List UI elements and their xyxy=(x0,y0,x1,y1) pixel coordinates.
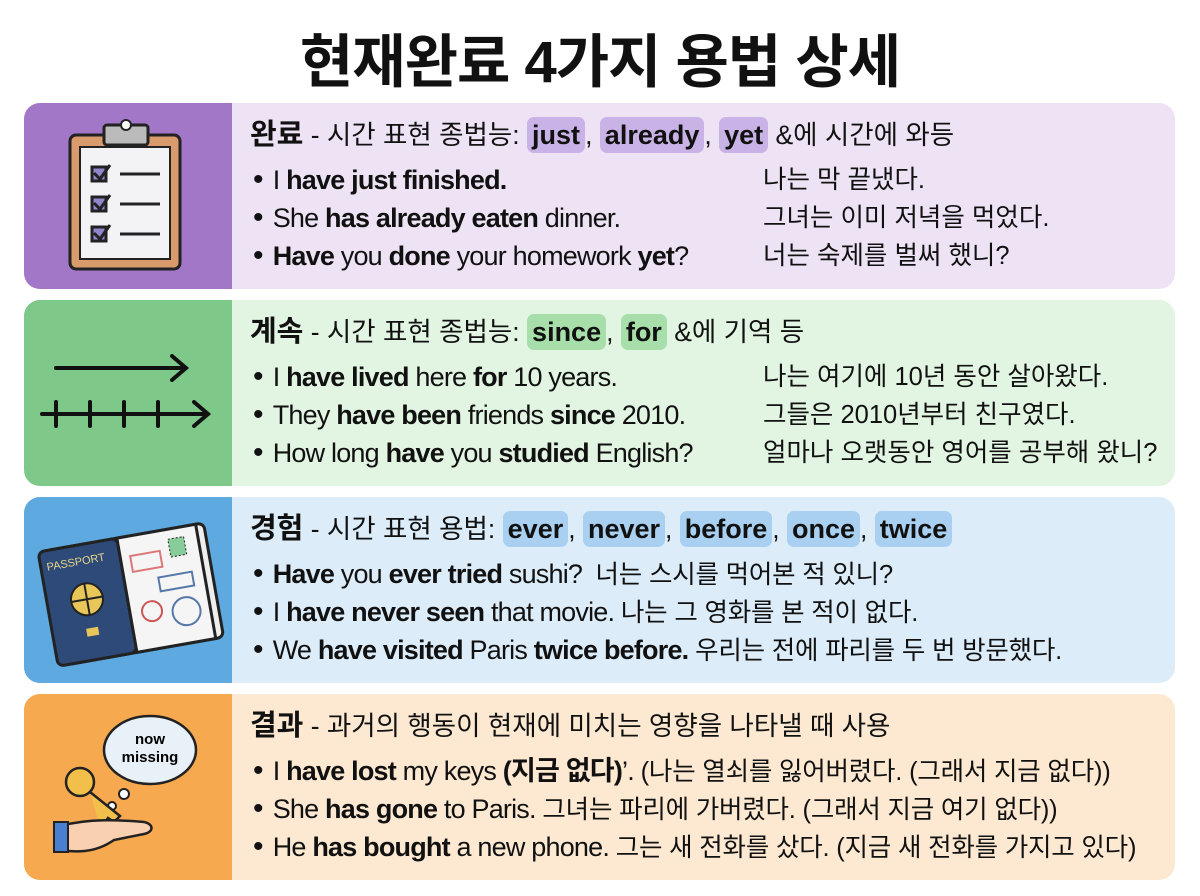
text: 경험 xyxy=(250,511,1062,666)
text: 완료: • Have you done your homework yet? xyxy=(253,239,688,272)
panel: 완료 xyxy=(24,103,1175,289)
icon: timeline arrows xyxy=(24,300,232,486)
text: 경험: • Have you ever tried sushi? 너는 스시를 먹어본 적 있니? xyxy=(253,557,893,590)
icon: hand, key, thought cloud: now xyxy=(135,731,165,748)
icon: hand, key, thought cloud: missing xyxy=(122,749,178,766)
text: 완료: 나는 막 끝냈다. xyxy=(763,166,925,194)
text: 결과: 결과 - 과거의 행동이 현재에 미치는 영향을 나타낼 때 사용 xyxy=(250,710,890,742)
text: 계속: 그들은 2010년부터 친구였다. xyxy=(763,401,1076,429)
text: 계속: • How long have you studied English? xyxy=(253,436,693,469)
text: 계속: • They have been friends since 2010. xyxy=(253,398,685,431)
text: 경험: • We have visited Paris twice before. 우리는 전에 파리를 두 번 방문했다. xyxy=(253,633,1062,666)
panel: 결과 xyxy=(24,694,1175,880)
text: 결과: • He has bought a new phone. 그는 새 전화를 샀다. (지금 새 전화를 가지고 있다) xyxy=(253,830,1136,863)
text: 완료: 그녀는 이미 저녁을 먹었다. xyxy=(763,204,1049,232)
text: 결과: • She has gone to Paris. 그녀는 파리에 가버렸다. (그래서 지금 여기 없다)) xyxy=(253,792,1057,825)
text: 완료 xyxy=(250,117,1049,272)
text: 계속: • I have lived here for 10 years. xyxy=(253,360,617,393)
text: 결과 xyxy=(250,710,1136,863)
text: 계속: 나는 여기에 10년 동안 살아왔다. xyxy=(763,363,1108,391)
icon: clipboard xyxy=(24,103,232,289)
text: 계속: 계속 - 시간 표현 종법능: since, for &에 기역 등 xyxy=(250,316,804,348)
title: 현재완료 4가지 용법 상세 xyxy=(300,30,900,95)
text: 완료: 완료 - 시간 표현 종법능: just, already, yet &에 시간에 와등 xyxy=(250,119,954,151)
text: 계속: 얼마나 오랫동안 영어를 공부해 왔니? xyxy=(763,439,1157,467)
text: 완료: • She has already eaten dinner. xyxy=(253,201,620,234)
panel: 계속 xyxy=(24,300,1175,486)
icon: passport: PASSPORT xyxy=(46,552,106,574)
icon: hand, key, thought cloud xyxy=(24,694,232,880)
text: 경험: 경험 - 시간 표현 용법: ever, never, before, once, twice xyxy=(250,513,947,545)
panel: 경험 xyxy=(24,497,1175,683)
text: 경험: • I have never seen that movie. 나는 그 영화를 본 적이 없다. xyxy=(253,595,918,628)
icon: passport xyxy=(24,497,232,683)
text: 완료: 너는 숙제를 벌써 했니? xyxy=(763,242,1010,270)
text: 완료: • I have just finished. xyxy=(253,163,506,196)
text: 계속 xyxy=(250,314,1157,469)
text: 결과: • I have lost my keys (지금 없다)’. (나는 열쇠를 잃어버렸다. (그래서 지금 없다)) xyxy=(253,754,1111,787)
